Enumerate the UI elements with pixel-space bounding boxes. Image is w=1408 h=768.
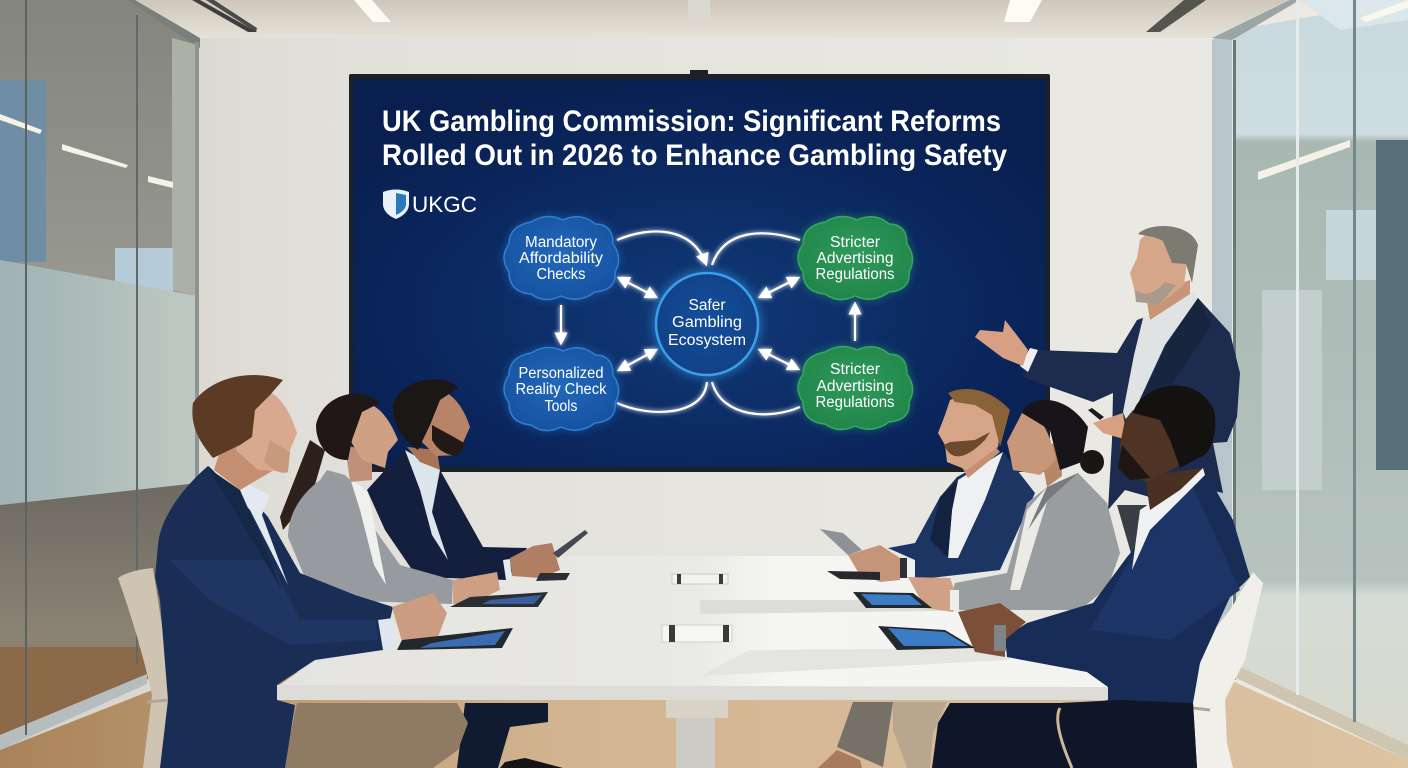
title: UK Gambling Commission: Significant Reforms bbox=[382, 105, 1001, 138]
title: Rolled Out in 2026 to Enhance Gambling Safety bbox=[382, 139, 1008, 172]
node: Safer Gambling Ecosystem: Safer bbox=[688, 297, 726, 314]
connector arrows bbox=[561, 231, 855, 414]
node: Stricter Advertising Regulations (bottom): Advertising bbox=[816, 378, 894, 395]
tablets left bbox=[397, 592, 548, 650]
node: Stricter Advertising Regulations (top): Advertising bbox=[816, 250, 894, 267]
node: Mandatory Affordability Checks bbox=[504, 216, 619, 300]
left person near bbox=[155, 375, 447, 768]
right person near bbox=[932, 386, 1250, 768]
node: Stricter Advertising Regulations (top) bbox=[798, 216, 913, 300]
left person middle bbox=[280, 394, 500, 604]
node: Personalized Reality Check Tools: Personalized bbox=[518, 365, 604, 382]
right glass wall bbox=[1212, 0, 1408, 760]
logo: UKGC: UKGC bbox=[412, 192, 477, 217]
node: Safer Gambling Ecosystem bbox=[653, 270, 761, 378]
table bbox=[277, 556, 1108, 700]
title bbox=[382, 105, 1008, 172]
right chair bbox=[1108, 572, 1263, 768]
node: Mandatory Affordability Checks: Checks bbox=[536, 266, 586, 283]
left chair bbox=[118, 568, 292, 768]
ceiling bbox=[127, 0, 1292, 38]
left glass wall bbox=[0, 0, 200, 750]
presenter bbox=[975, 226, 1240, 560]
floor bbox=[0, 672, 1408, 768]
node: Safer Gambling Ecosystem: Ecosystem bbox=[668, 332, 746, 349]
node: Personalized Reality Check Tools: Tools bbox=[544, 398, 578, 415]
node: Stricter Advertising Regulations (top): Stricter bbox=[830, 234, 880, 251]
node: Stricter Advertising Regulations (bottom): Regulations bbox=[816, 394, 895, 411]
right person far bbox=[820, 389, 1035, 582]
logo: UKGC bbox=[383, 190, 477, 219]
node: Stricter Advertising Regulations (top): Regulations bbox=[816, 266, 895, 283]
tablets right bbox=[853, 592, 975, 650]
node: Stricter Advertising Regulations (bottom): Stricter bbox=[830, 361, 880, 378]
screen bbox=[349, 70, 1050, 472]
right person middle bbox=[908, 400, 1120, 612]
node: Safer Gambling Ecosystem: Gambling bbox=[672, 314, 742, 331]
under-table legs and pedestal bbox=[283, 700, 947, 768]
node: Personalized Reality Check Tools: Reality Check bbox=[516, 381, 607, 398]
node: Mandatory Affordability Checks: Affordability bbox=[519, 250, 603, 267]
node: Stricter Advertising Regulations (bottom) bbox=[798, 346, 913, 430]
node: Personalized Reality Check Tools bbox=[504, 347, 619, 431]
left person far bbox=[367, 379, 588, 581]
node: Mandatory Affordability Checks: Mandatory bbox=[525, 234, 597, 251]
